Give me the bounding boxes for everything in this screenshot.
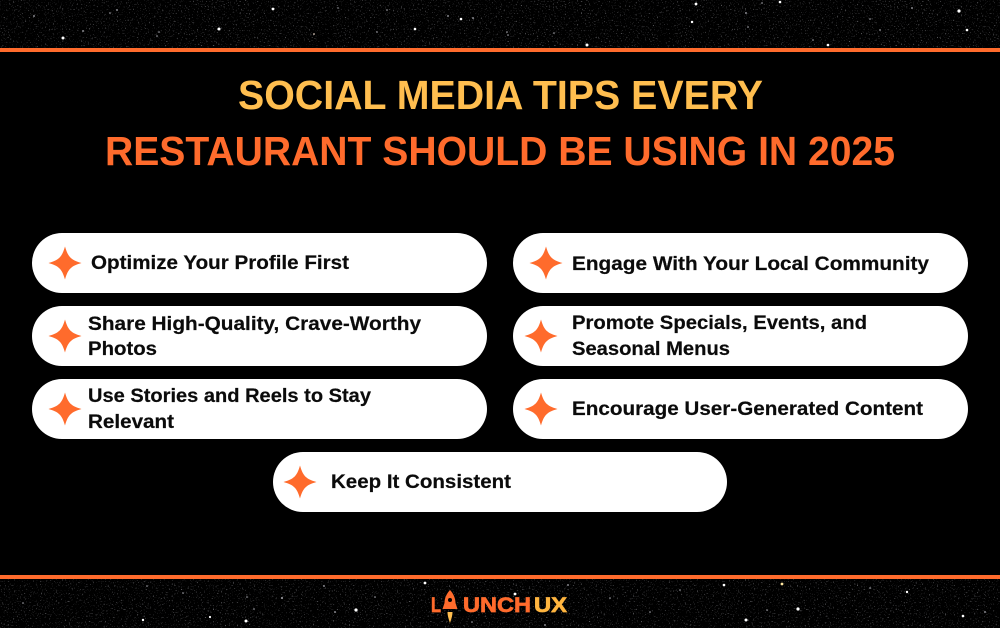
tip: optimize profile: Optimize Your Profile First xyxy=(91,252,350,274)
tip: keep consistent: Keep It Consistent xyxy=(331,471,512,493)
tip: share photos: Photos xyxy=(88,338,157,360)
logo: LaunchUX: UNCH xyxy=(463,593,531,617)
title xyxy=(105,72,895,174)
bottom orange band xyxy=(0,575,1000,579)
tip: user-generated content xyxy=(513,379,968,439)
tip: keep consistent xyxy=(273,452,727,512)
logo: LaunchUX: L xyxy=(431,593,441,617)
tip: local community xyxy=(513,233,968,293)
tip: stories and reels: Use Stories and Reels to Stay xyxy=(88,385,371,407)
logo: LaunchUX: UX xyxy=(534,593,568,617)
tip: promote specials: Promote Specials, Events, and xyxy=(572,312,867,334)
tip: local community: Engage With Your Local Community xyxy=(572,253,929,275)
top orange band xyxy=(0,48,1000,52)
tip: promote specials xyxy=(513,306,968,366)
title: SOCIAL MEDIA TIPS EVERY xyxy=(238,72,763,118)
tip: stories and reels: Relevant xyxy=(88,411,175,433)
title: RESTAURANT SHOULD BE USING IN 2025 xyxy=(105,128,895,174)
tip: optimize profile xyxy=(32,233,487,293)
tip: share photos: Share High-Quality, Crave-Worthy xyxy=(88,313,421,335)
logo: LaunchUX xyxy=(431,590,568,623)
tip: stories and reels xyxy=(32,379,487,439)
tip: share photos xyxy=(32,306,487,366)
icon: rocket xyxy=(442,590,458,623)
tip: user-generated content: Encourage User-Generated Content xyxy=(572,398,924,420)
tip: promote specials: Seasonal Menus xyxy=(572,338,730,360)
